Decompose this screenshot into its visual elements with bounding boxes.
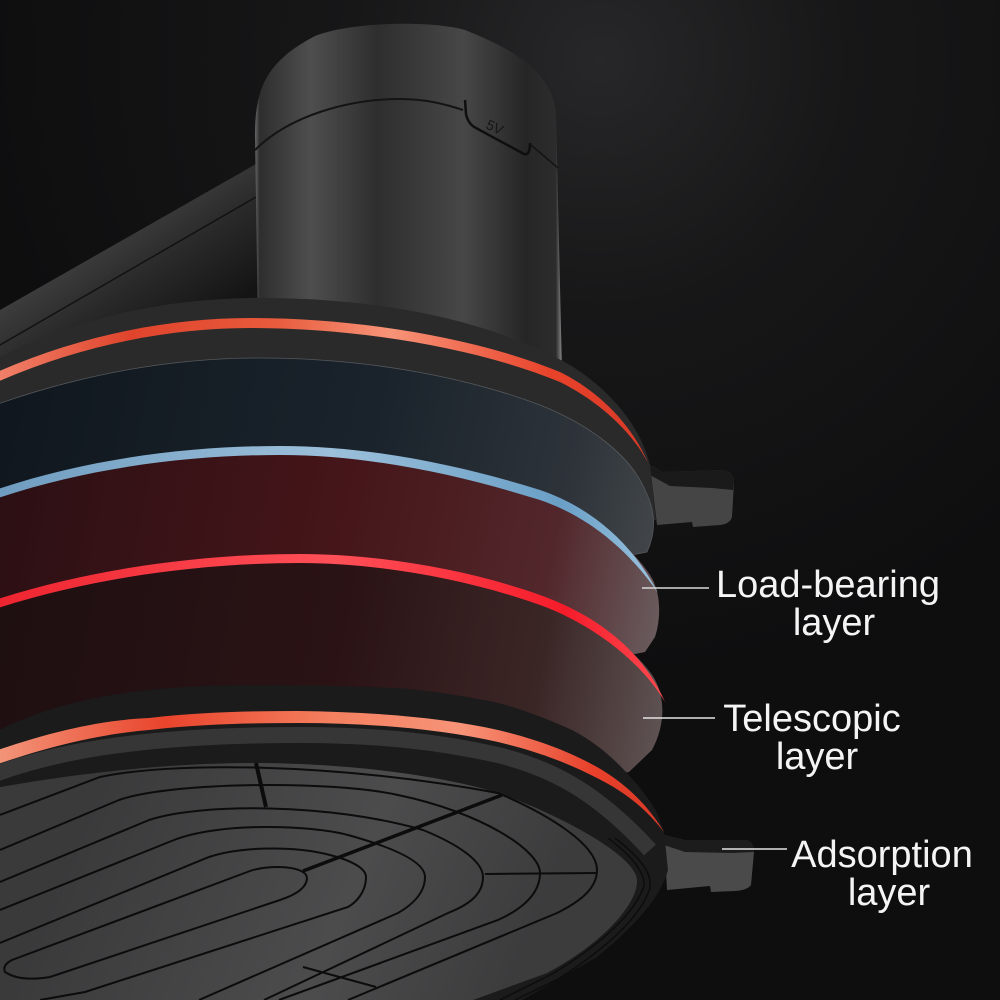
- label: load-bearing layer: layer: [793, 602, 876, 644]
- label: telescopic layer: layer: [776, 736, 859, 778]
- top cap layer: [0, 298, 656, 520]
- label: load-bearing layer: Load-bearing: [716, 564, 940, 606]
- load-bearing disc: [0, 358, 654, 600]
- label: adsorption layer: Adsorption: [791, 834, 973, 876]
- arm: [0, 164, 262, 370]
- telescopic maroon disc: [0, 450, 659, 700]
- blue ring: [0, 446, 658, 593]
- edge ribs: [500, 838, 650, 1000]
- red ring: [0, 554, 665, 702]
- lower tab: [664, 835, 754, 892]
- leader: adsorption: [722, 848, 787, 850]
- base plate with grooves: [0, 763, 650, 1000]
- leader: load-bearing: [642, 587, 709, 589]
- cylinder housing: 5V: [484, 116, 507, 138]
- adsorption dark disc: [0, 558, 662, 800]
- label: telescopic layer: Telescopic: [723, 698, 901, 740]
- grooves: [0, 767, 597, 1000]
- label: adsorption layer: layer: [848, 872, 931, 914]
- bottom layer rim: [0, 685, 668, 1000]
- cylinder housing: [255, 24, 562, 372]
- leader: telescopic: [643, 717, 715, 719]
- upper tab: [650, 465, 734, 527]
